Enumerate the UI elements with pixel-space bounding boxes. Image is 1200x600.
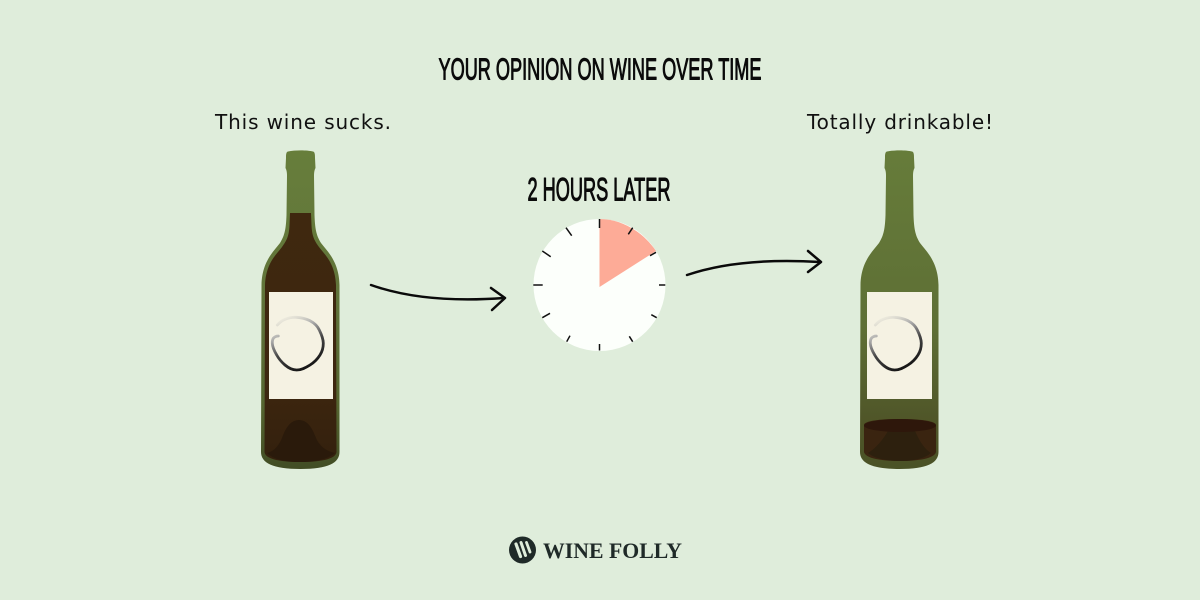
arrow: clock to right bottle xyxy=(687,251,821,275)
caption: this wine sucks: This wine sucks. xyxy=(214,110,391,134)
logo: wine folly xyxy=(509,536,682,564)
title: YOUR OPINION ON WINE OVER TIME xyxy=(438,52,762,86)
caption: totally drinkable: Totally drinkable! xyxy=(806,110,993,134)
elapsed time wedge xyxy=(600,219,656,287)
label xyxy=(867,292,932,399)
right bottle: nearly empty xyxy=(860,150,938,469)
label ring xyxy=(870,317,921,370)
wine fill xyxy=(264,213,336,462)
label ring xyxy=(272,317,323,370)
label xyxy=(269,292,333,399)
left bottle: full of wine xyxy=(261,150,340,469)
bottle punt xyxy=(868,431,931,461)
remaining wine xyxy=(864,419,936,461)
logo mark xyxy=(509,536,536,564)
clock xyxy=(533,219,666,351)
clock ticks xyxy=(533,219,665,350)
logo wordmark: WINE FOLLY xyxy=(543,538,682,563)
clock heading: 2 HOURS LATER xyxy=(528,172,670,208)
bottle punt xyxy=(267,420,335,462)
wine surface xyxy=(864,419,936,432)
arrow: left bottle to clock xyxy=(371,285,505,310)
